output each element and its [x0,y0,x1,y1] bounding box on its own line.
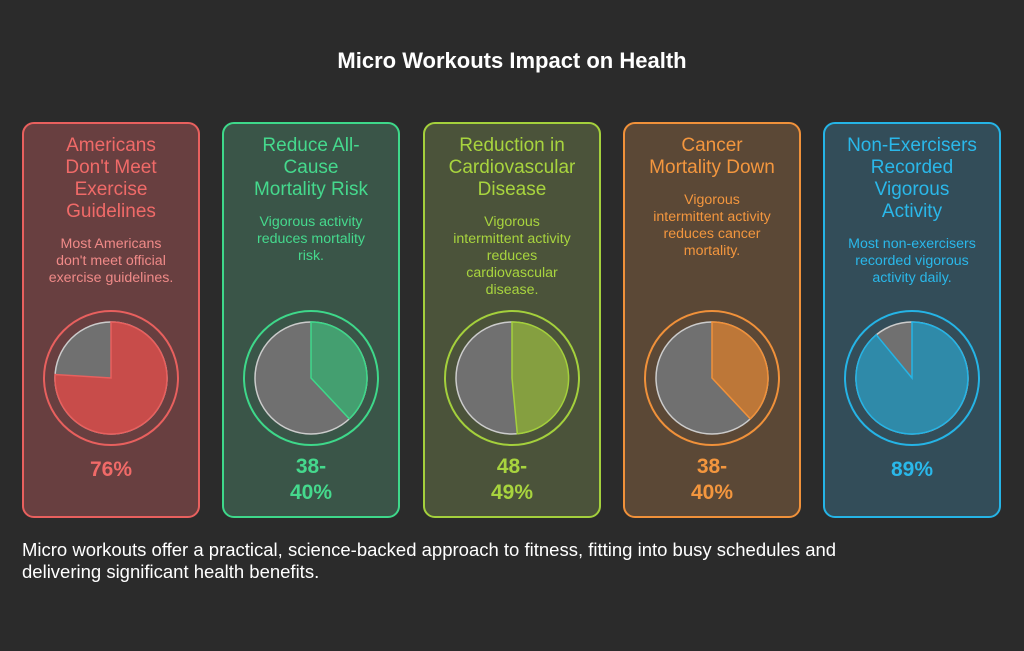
heading text: Most Americans [61,236,161,252]
heading text [449,135,575,298]
value [290,455,332,504]
heading text: Vigorous [875,179,949,200]
heading text: Cancer [681,135,743,156]
heading text [847,135,977,286]
heading text: Americans [66,135,156,156]
heading text: Reduce All- [262,135,360,156]
heading text [49,135,173,286]
panel: all-cause mortality [222,122,400,518]
heading text: disease. [486,282,538,298]
heading text: Vigorous [684,192,740,208]
heading text [649,135,775,259]
pie chart 89% [844,310,980,446]
heading text: Non-Exercisers [847,135,977,156]
footer text [22,539,836,582]
heading text: exercise guidelines. [49,270,173,286]
heading text: reduces mortality [257,231,365,247]
heading text: activity daily. [872,270,952,286]
pie chart 76% [43,310,179,446]
heading text: Recorded [871,157,953,178]
heading text: mortality. [684,243,740,259]
heading text: risk. [298,248,324,264]
value: 38- [697,455,727,478]
heading text: Most non-exercisers [848,236,976,252]
value: 40% [290,481,332,504]
value: 38- [296,455,326,478]
panel: non-exercisers [823,122,1001,518]
heading text: Activity [882,201,942,222]
heading text: Cause [284,157,338,178]
value: 48- [497,455,527,478]
heading text: Don't Meet [65,157,157,178]
heading text: intermittent activity [453,231,571,247]
heading text: Disease [478,179,546,200]
pie chart 38% [243,310,379,446]
panel: cancer [623,122,801,518]
footer text: Micro workouts offer a practical, science-backed approach to fitness, fitting into busy schedules and [22,539,836,560]
heading text: reduces [487,248,537,264]
value [491,455,533,504]
heading text: Vigorous [484,214,540,230]
heading text: Exercise [75,179,147,200]
footer text: delivering significant health benefits. [22,561,319,582]
heading text: Guidelines [66,201,156,222]
heading text: reduces cancer [664,226,760,242]
heading text: Reduction in [459,135,565,156]
value: 89% [891,458,933,481]
pie chart 48.5% [444,310,580,446]
heading text: Mortality Down [649,157,775,178]
heading text: Mortality Risk [254,179,368,200]
value: 76% [90,458,132,481]
panel: americans [22,122,200,518]
pie chart 38% [644,310,780,446]
heading text: don't meet official [56,253,166,269]
value [691,455,733,504]
heading text: recorded vigorous [855,253,969,269]
heading text: Vigorous activity [259,214,363,230]
heading text [254,135,368,264]
value: 49% [491,481,533,504]
heading text: intermittent activity [653,209,771,225]
panel: cardiovascular [423,122,601,518]
value: 40% [691,481,733,504]
title: Micro Workouts Impact on Health [337,48,687,73]
heading text: cardiovascular [466,265,558,281]
heading text: Cardiovascular [449,157,575,178]
